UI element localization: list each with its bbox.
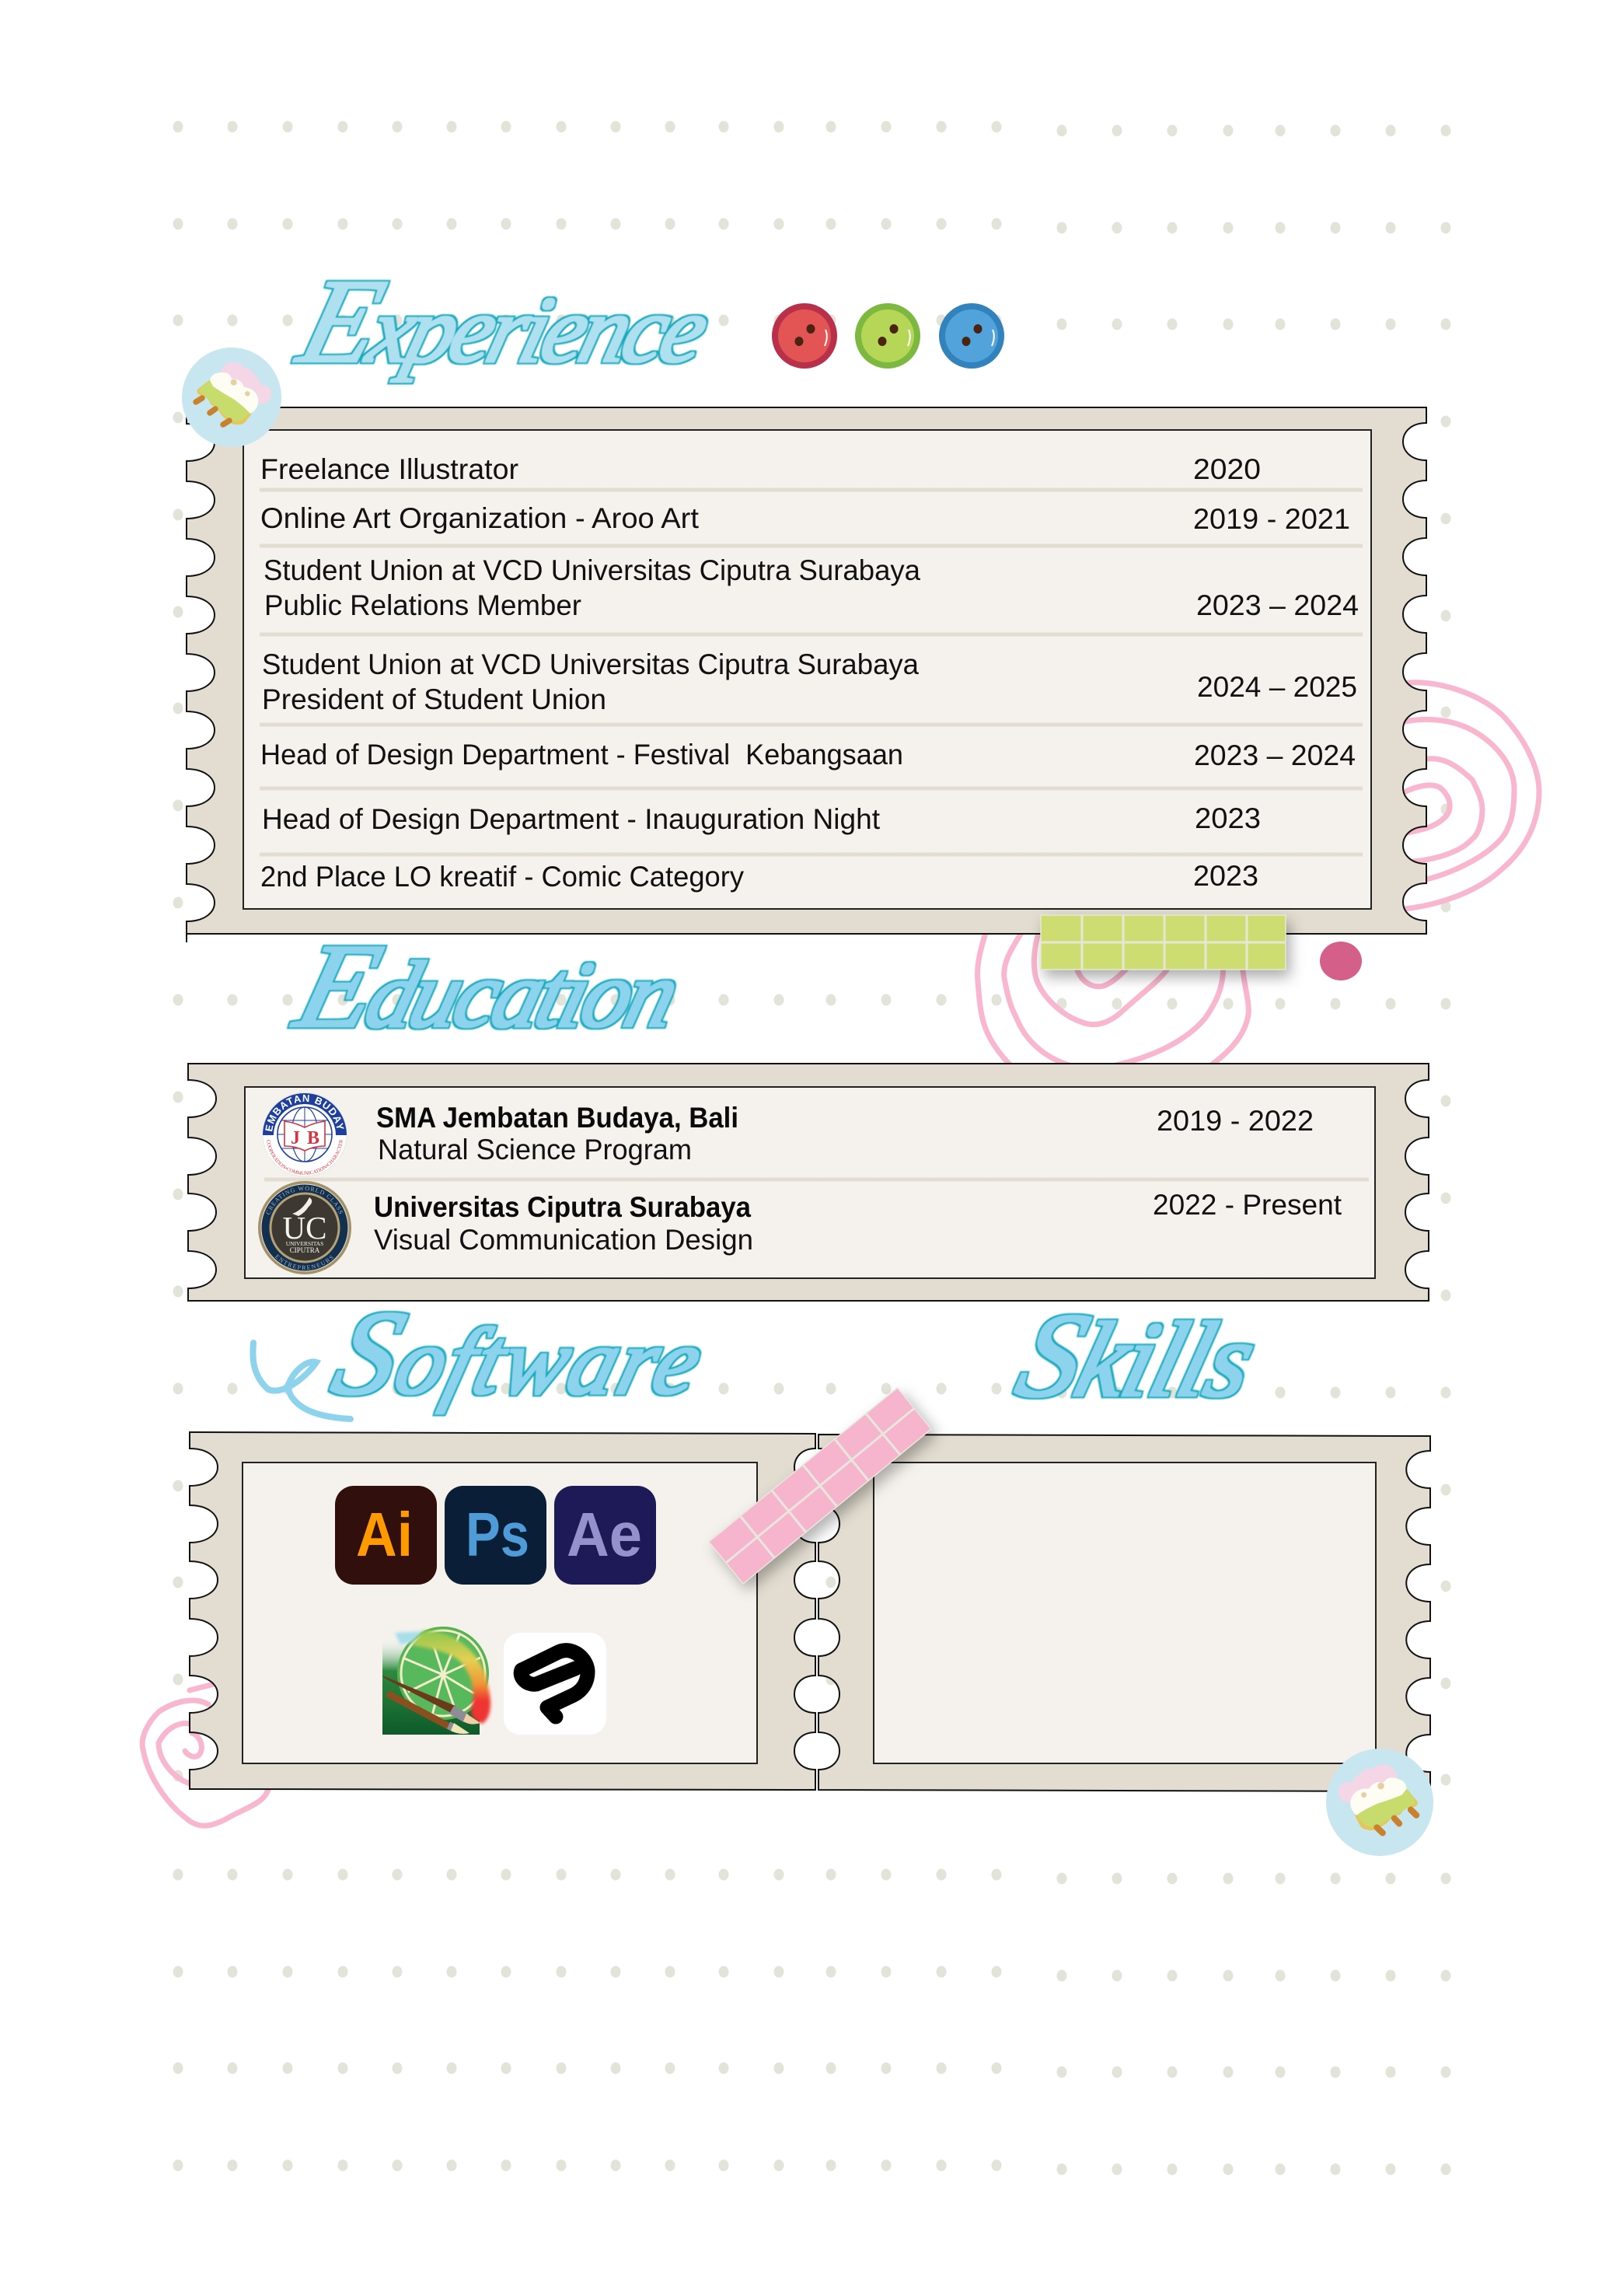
icon: mochi badge bottom right [1326, 1749, 1433, 1856]
row: online art organization [260, 502, 1350, 535]
education: sma jembatan budaya: SMA Jembatan Budaya, Bali [376, 1102, 738, 1134]
icon: adobe photoshop [445, 1486, 546, 1585]
panel: skills frame [818, 1435, 1430, 1791]
row: student union public relations: 2023 – 2024 [1196, 589, 1359, 621]
icon: adobe illustrator: Ai [356, 1500, 413, 1569]
row: student union public relations [264, 554, 1359, 621]
icon: jembatan budaya logo: B [307, 1128, 319, 1148]
icon: jembatan budaya logo: JEMBATAN BUDAYA [265, 1095, 344, 1132]
row: inauguration night: Head of Design Department - Inauguration Night [262, 803, 881, 835]
row: student union president: Student Union at VCD Universitas Ciputra Surabaya [262, 648, 919, 680]
row: lo kreatif: 2nd Place LO kreatif - Comic Category [260, 861, 744, 893]
row: student union public relations: Student Union at VCD Universitas Ciputra Surabaya [264, 554, 920, 586]
row: freelance illustrator: Freelance Illustrator [260, 453, 518, 485]
heading: skills: Skills [1005, 1288, 1271, 1422]
row: lo kreatif [260, 860, 1258, 893]
icon: adobe after effects: Ae [567, 1500, 642, 1569]
row: freelance illustrator [260, 453, 1261, 485]
education: sma jembatan budaya: Natural Science Program [378, 1134, 692, 1165]
row: inauguration night: 2023 [1195, 802, 1261, 834]
row: festival kebangsaan: 2023 – 2024 [1194, 739, 1356, 771]
pink dot [1320, 942, 1362, 980]
pink spiral below experience panel [977, 933, 1248, 1065]
icon: blue button [939, 303, 1004, 369]
icon: mochi badge top left [182, 348, 281, 447]
icon: jembatan budaya logo: COOPERATION•COMMUNICATION•CHARACTER [267, 1140, 343, 1175]
education: sma jembatan budaya [376, 1102, 1314, 1165]
background dot grid [173, 121, 1450, 2175]
row: student union president: President of Student Union [262, 683, 606, 715]
row: festival kebangsaan: Head of Design Department - Festival Kebangsaan [260, 739, 903, 771]
icon: universitas ciputra logo: UC [283, 1210, 326, 1246]
heading: experience: Experience [286, 254, 726, 388]
icon: universitas ciputra logo: CIPUTRA [290, 1246, 320, 1254]
row: online art organization: 2019 - 2021 [1193, 503, 1350, 535]
row: festival kebangsaan [260, 739, 1356, 771]
icon: adobe after effects [554, 1486, 656, 1585]
education: universitas ciputra: 2022 - Present [1153, 1189, 1342, 1221]
row: lo kreatif: 2023 [1193, 860, 1258, 892]
heading: education: Education [283, 919, 696, 1053]
pink washi tape [709, 1388, 931, 1584]
panel: software frame [190, 1432, 815, 1790]
icon: red button [772, 303, 837, 369]
pink spiral right of experience panel [1404, 683, 1539, 909]
education: universitas ciputra [374, 1189, 1342, 1256]
icon: jembatan budaya logo [263, 1092, 347, 1177]
panel: experience frame [187, 407, 1426, 942]
icon: green button [855, 303, 920, 369]
icon: universitas ciputra logo: ENTREPRENEURS [275, 1254, 333, 1270]
icon: adobe photoshop: Ps [466, 1500, 529, 1569]
row: student union public relations: Public Relations Member [264, 589, 581, 621]
education: universitas ciputra: Visual Communication Design [374, 1224, 753, 1256]
blue swirl beside software heading [253, 1343, 351, 1419]
panel: experience rows [260, 453, 1363, 893]
green washi tape [1041, 915, 1286, 970]
icon: adobe illustrator [335, 1486, 437, 1585]
row: online art organization: Online Art Organization - Aroo Art [260, 502, 700, 534]
row: student union president [262, 648, 1357, 715]
heading: software: Software [321, 1286, 719, 1420]
row: freelance illustrator: 2020 [1193, 453, 1261, 485]
icon: universitas ciputra logo: CREATING WORLD CLASS [266, 1186, 344, 1214]
education: universitas ciputra: Universitas Ciputra Surabaya [374, 1191, 751, 1223]
icon: jembatan budaya logo: J [291, 1128, 300, 1148]
panel: education frame [188, 1064, 1429, 1301]
icon: clip studio paint [504, 1633, 606, 1735]
icon: universitas ciputra logo: UNIVERSITAS [286, 1240, 323, 1247]
icon: universitas ciputra logo [258, 1181, 351, 1274]
row: inauguration night [262, 802, 1261, 835]
icon: corel painter [382, 1627, 490, 1735]
education: sma jembatan budaya: 2019 - 2022 [1157, 1105, 1314, 1137]
pink spiral bottom left [142, 1684, 268, 1826]
row: student union president: 2024 – 2025 [1197, 671, 1357, 703]
